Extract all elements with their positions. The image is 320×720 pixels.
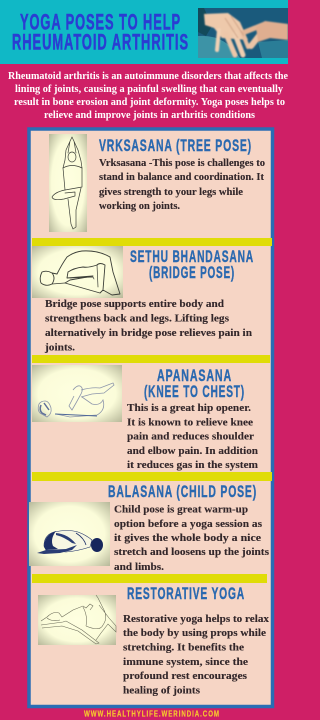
section: knee to chest [32,365,259,471]
section: tree pose [49,134,265,232]
body text: immune system, since the [123,657,249,668]
section: child pose [29,483,269,573]
body text: gives strength to your legs while [99,187,244,198]
section: restorative yoga [38,585,269,696]
body text: stand in balance and coordination. It [99,172,265,183]
heading [130,248,254,282]
title [12,10,189,54]
body text: stretch and loosens up the joints [114,547,269,558]
body text: Child pose is great warm-up [114,504,248,516]
icon: restorative pose figure [38,595,116,645]
body text: pain and reduces shoulder [127,432,255,442]
body text: option before a yoga session as [114,519,262,530]
body text: strengthens back and legs. Lifting legs [45,314,229,324]
body text [44,299,252,354]
body text: joints. [44,342,76,354]
body text: Restorative yoga helps to relax [123,614,269,625]
body text [123,614,269,696]
intro text: relieve and improve joints in arthritis conditions [44,110,255,121]
section: bridge pose [32,246,254,354]
heading: APANASANA [157,367,232,385]
body text: the body by using props while [123,628,267,639]
heading [144,367,245,401]
intro text: result in bone erosion and joint deformity. Yoga poses helps to [14,97,285,108]
heading: (BRIDGE POSE) [149,264,235,282]
intro text: lining of joints, causing a painful swelling that can eventually [15,84,283,95]
photo: hands [198,8,288,58]
body text: Bridge pose supports entire body and [45,299,224,310]
title: YOGA POSES TO HELP [20,10,181,34]
body text [99,158,265,212]
main panel [29,129,272,706]
body text: Vrksasana -This pose is challenges to [99,158,265,169]
body text: stretching. It benefits the [123,642,245,654]
body text: healing of joints [123,686,200,696]
icon: knee to chest figure [32,365,122,422]
footer url: WWW.HEALTHYLIFE.WERINDIA.COM [84,708,220,718]
body text: and limbs. [114,562,165,573]
body text: it reduces gas in the system [127,460,259,471]
body text: and elbow pain. In addition [127,446,258,457]
icon: bridge pose figure [32,246,123,298]
body text [114,504,269,573]
intro text [8,71,289,121]
body text: working on joints. [99,201,181,212]
body text: it gives the whole body a nice [114,533,262,544]
icon: child pose figure [29,502,110,566]
body text: It is known to relieve knee [127,418,254,428]
body text [127,403,259,471]
header band [0,0,288,64]
body text: alternatively in bridge pose relieves pain in [45,328,252,339]
intro text: Rheumatoid arthritis is an autoimmune disorders that affects the [8,71,288,82]
body text: This is a great hip opener. [127,403,252,414]
icon: tree pose figure [49,134,87,232]
body text: profound rest encourages [123,671,247,682]
